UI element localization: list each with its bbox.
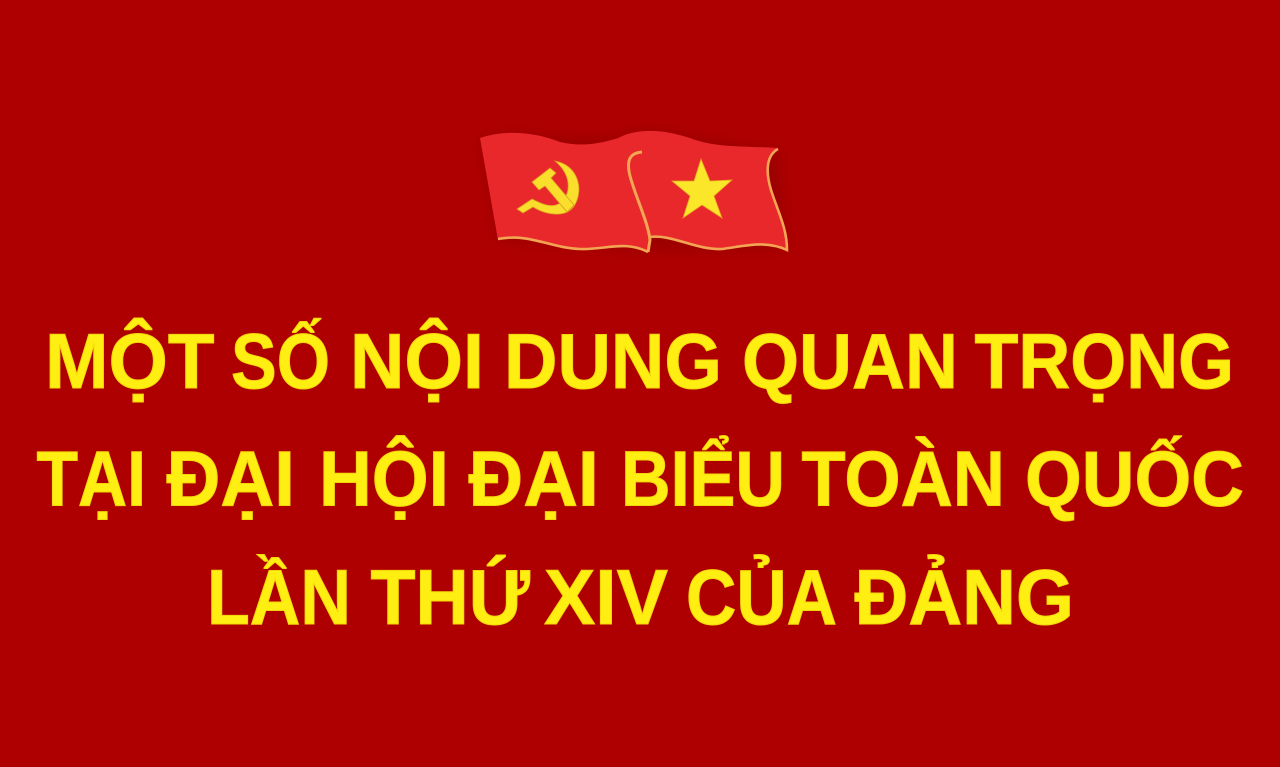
title line 1: NỘI [350, 317, 484, 405]
title line 1 [45, 317, 1234, 405]
title line 1: QUAN [742, 317, 958, 405]
title line 2: TẠI [36, 434, 146, 522]
title line 1: DUNG [504, 317, 722, 405]
icon: hammer and sickle [517, 161, 579, 214]
icon: party and national flags [480, 131, 787, 252]
title line 2: BIỂU [621, 434, 785, 522]
national flag with star [618, 131, 787, 252]
title line 3: THỨ [370, 553, 530, 641]
title line 2: ĐẠI [166, 434, 295, 522]
title line 2: QUỐC [1025, 434, 1244, 522]
title line 3: ĐẢNG [854, 553, 1074, 641]
icon: yellow star [672, 159, 732, 218]
title line 1: TRỌNG [974, 317, 1234, 405]
title line 3: CỦA [686, 553, 837, 641]
title line 1: MỘT [45, 317, 214, 405]
title line 2 [36, 434, 1244, 522]
title line 1: SỐ [231, 317, 330, 405]
party flag with hammer and sickle [480, 133, 650, 252]
title line 2: HỘI [319, 434, 449, 522]
title line 3: XIV [544, 553, 668, 641]
title line 2: ĐẠI [468, 434, 599, 522]
title line 2: TOÀN [802, 434, 1005, 522]
title [36, 317, 1244, 641]
title line 3: LẦN [207, 553, 351, 641]
title line 3 [207, 553, 1074, 641]
